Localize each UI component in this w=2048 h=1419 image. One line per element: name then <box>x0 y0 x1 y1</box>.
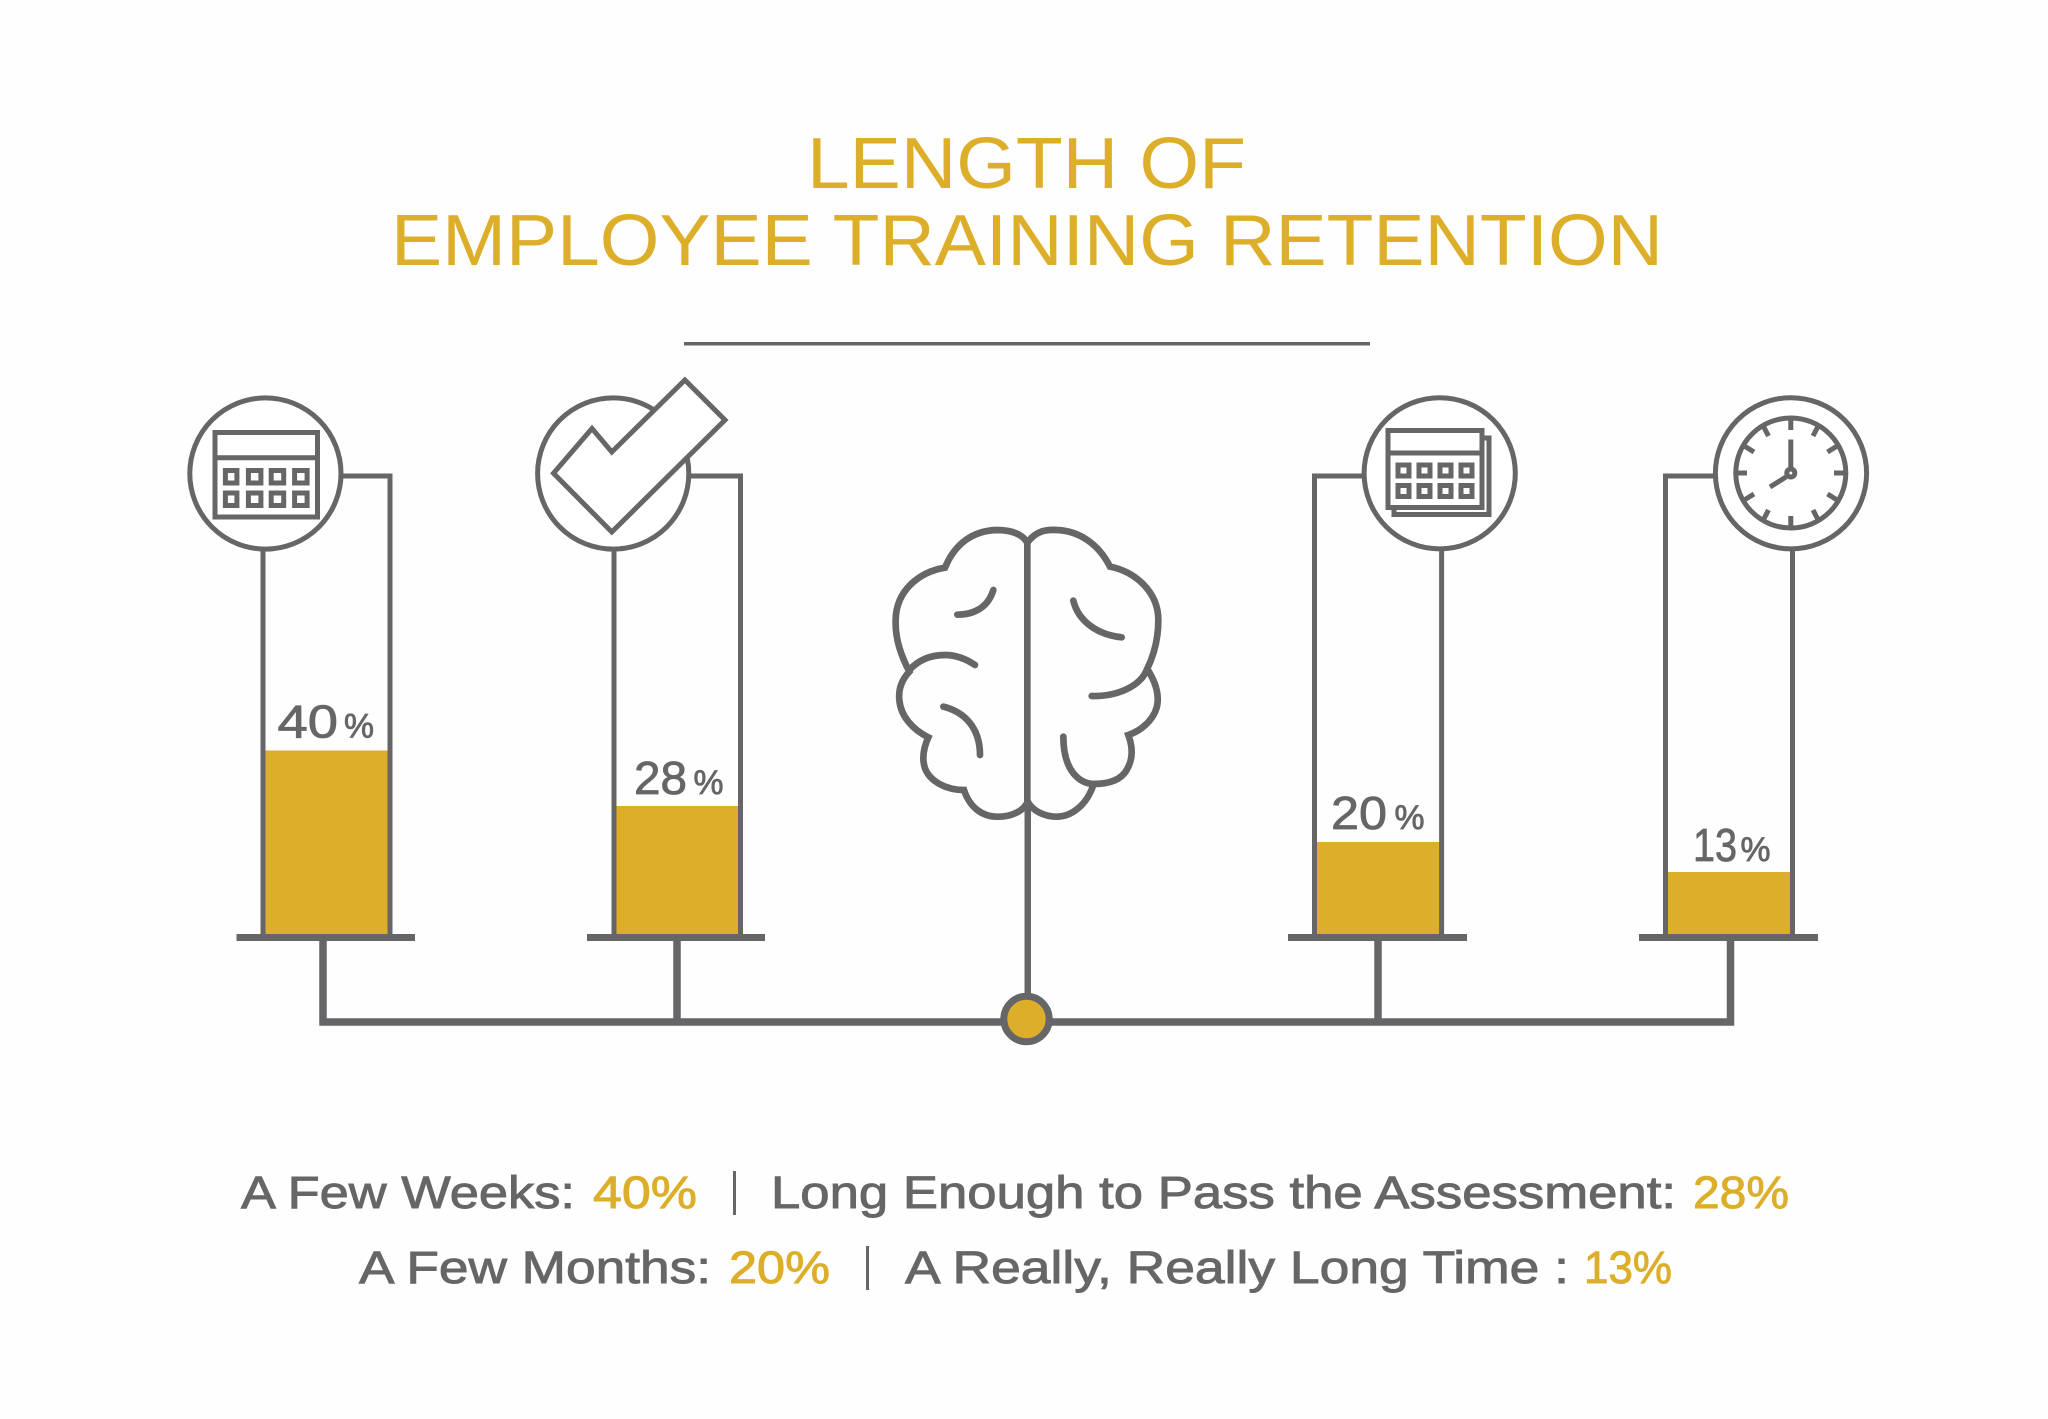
value label 40% <box>278 696 374 748</box>
value label 40%: % <box>344 708 374 746</box>
value label 20%: % <box>1394 799 1424 837</box>
value label 13% <box>1693 819 1770 871</box>
value label 20% <box>1331 787 1424 839</box>
value label 20%: 20 <box>1331 787 1387 839</box>
bus connector with stems <box>323 800 1730 1022</box>
legend line 2: 13% <box>1584 1242 1672 1293</box>
value label 13%: 13 <box>1693 819 1737 871</box>
legend line 1: 28% <box>1693 1167 1789 1218</box>
bar fill 40% <box>265 750 388 934</box>
title: LENGTH OF <box>807 124 1246 204</box>
legend text <box>241 1167 1789 1293</box>
legend line 1 <box>241 1167 1789 1218</box>
legend line 1: 40% <box>593 1167 697 1218</box>
value label 28% <box>634 752 724 804</box>
legend line 2 <box>359 1242 1672 1293</box>
panel: a few months bar <box>1288 476 1467 941</box>
title: EMPLOYEE TRAINING RETENTION <box>391 201 1663 281</box>
legend line 2: A Really, Really Long Time : <box>905 1242 1569 1293</box>
value label 13%: % <box>1740 831 1770 869</box>
panel: long enough to pass bar <box>587 476 765 941</box>
bar fill 13% <box>1668 872 1790 934</box>
center node <box>1004 996 1049 1042</box>
title <box>391 124 1663 281</box>
panel: a really long time bar <box>1639 476 1818 941</box>
icon: brain <box>896 530 1158 817</box>
bar fill 28% <box>616 806 739 934</box>
value label 40%: 40 <box>278 696 338 748</box>
icon: checkmark in circle <box>538 380 725 549</box>
icon: clock in circle <box>1715 398 1867 549</box>
value label 28%: % <box>694 764 724 802</box>
panel: a few weeks bar <box>236 476 415 941</box>
icon: stacked calendar in circle <box>1364 398 1515 549</box>
value label 28%: 28 <box>634 752 687 804</box>
bar fill 20% <box>1316 842 1440 934</box>
legend line 1: Long Enough to Pass the Assessment: <box>771 1167 1676 1218</box>
legend line 2: 20% <box>729 1242 830 1293</box>
legend line 1: A Few Weeks: <box>241 1167 575 1218</box>
legend line 2: A Few Months: <box>359 1242 711 1293</box>
icon: calendar in circle <box>190 398 341 549</box>
